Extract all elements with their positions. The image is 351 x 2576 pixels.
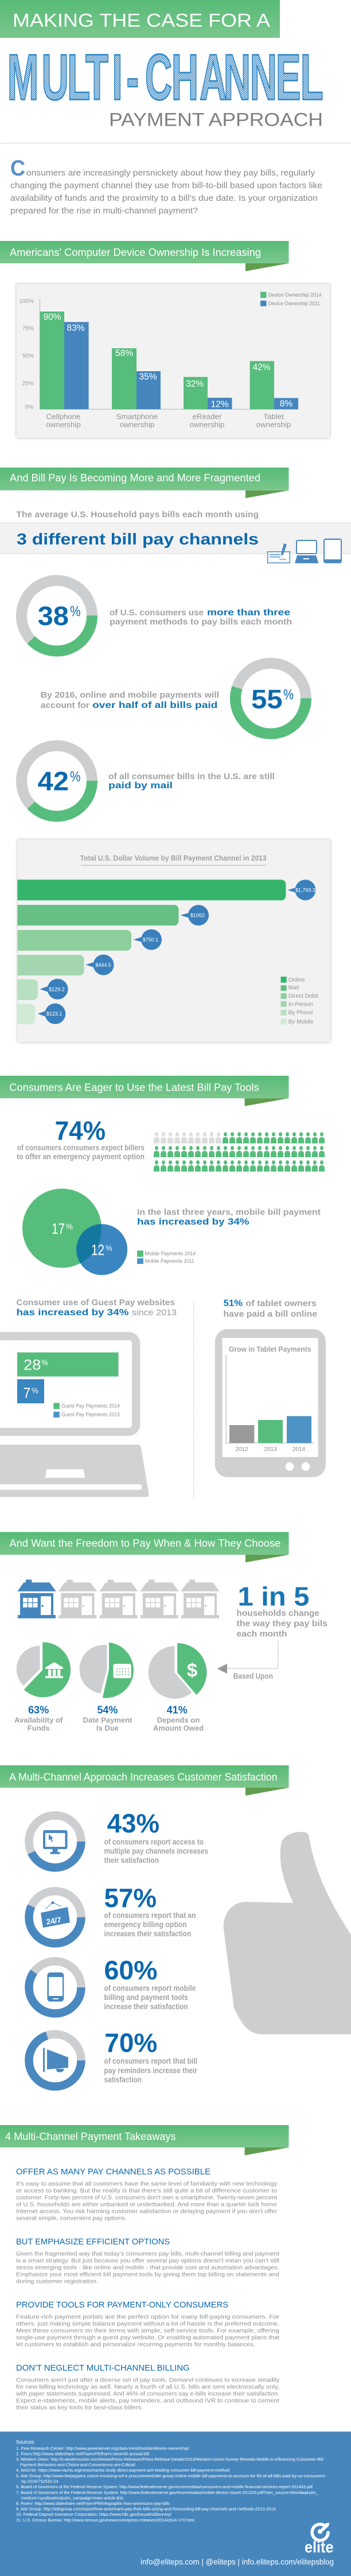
stat donut: 55%: % — [283, 687, 294, 703]
takeaway 1 — [16, 2167, 278, 2221]
stat text: 43%: of consumers report access to — [104, 1838, 204, 1846]
stat: 1 in 5 households: each month — [236, 1630, 287, 1639]
category labels: eReader — [192, 413, 222, 421]
takeaway 2: during customer registration. — [16, 2278, 98, 2285]
takeaway 4: their status as key tools for best-class billers. — [16, 2404, 143, 2411]
section banner: customer satisfaction — [0, 1765, 289, 1796]
stat text: mobile bill payment: has increased by 34% — [137, 1217, 249, 1227]
sources list: Payment-Behaviors-and-Choice-and-Convenience-are-Critical/ — [20, 2462, 136, 2468]
channel legend: By Phone — [288, 1010, 314, 1016]
stat text: guest pay: Consumer use of Guest Pay websites — [16, 1298, 175, 1308]
takeaway 3: single-use payment through a guest pay website. Or enabling automated payment plans that — [16, 2334, 279, 2341]
takeaway 4: Expect e-statements, mobile alerts, pay reminders, and outbound IVR to continue to cement — [16, 2397, 279, 2404]
stat text: 57%: increases their satisfaction — [104, 1929, 191, 1938]
sources list: 8. Fiserv: http://www.slideshare.net/FiservPR/infographic-how-americans-pay-bills — [16, 2501, 170, 2506]
year labels: 2014 — [292, 1446, 306, 1453]
channel legend: Mail — [288, 985, 299, 991]
pie labels: 54% — [97, 1705, 118, 1716]
icon: laptop — [295, 540, 319, 563]
sources list: Sources — [16, 2439, 34, 2445]
panel: device ownership bar chart: 25% — [22, 381, 34, 387]
stat text: 42% — [108, 772, 275, 791]
bar value labels: 58% — [115, 349, 133, 359]
stat text: 60%: 60% — [104, 1955, 157, 1985]
stat donut: 42%: % — [70, 769, 80, 785]
pie labels: 41% — [167, 1705, 188, 1716]
takeaway 2: stress emerging tools - like online and mobile - that provide cost and automation advantages. — [16, 2264, 279, 2271]
guest pay bar 2014 — [17, 1352, 118, 1376]
chart legend: Device Ownership 2011 — [268, 301, 320, 306]
stat text: 70%: satisfaction — [104, 2075, 142, 2084]
venn chart: mobile payments — [22, 1189, 127, 1275]
guest pay bar 2013: 7 — [24, 1386, 30, 1402]
value bubbles: $129.2 — [49, 987, 65, 993]
panel: device ownership bar chart: 50% — [22, 353, 34, 360]
channel legend: Direct Debit — [288, 993, 318, 999]
growth bars — [229, 1416, 311, 1443]
bars 2014 — [40, 312, 274, 409]
bar value labels: 42% — [252, 363, 271, 372]
guest pay bar 2013 — [17, 1379, 44, 1403]
panel: dollar volume by channel — [17, 839, 330, 1042]
elite wordmark: elite — [305, 2538, 334, 2556]
takeaway 3: others, just making simple balance payment without a lot of hassle is the preferred outcome. — [16, 2320, 279, 2327]
takeaway 2: Given the fragmented way that today's consumers pay bills, multi-channel billing and payment — [16, 2250, 279, 2257]
intro paragraph: onsumers are increasingly persnickety about how they pay bills, regularly — [26, 169, 315, 178]
icon: monitor — [43, 1830, 68, 1854]
pie: depends on amount owed 41% — [149, 1643, 206, 1699]
icon: tablet — [323, 539, 342, 563]
sources list: 9. Aite Group: http://aitegroup.com/report/how-americans-pay-their-bills-sizing-and-forecasting-bill-pay-channels-and-methods-2013-2016 — [16, 2507, 276, 2512]
stat text: 55% — [41, 691, 219, 710]
stat: 1 in 5 households — [236, 1581, 327, 1639]
stat text: 60%: increase their satisfaction — [104, 2002, 188, 2011]
pie labels — [14, 1705, 204, 1733]
takeaway 4: with paper statements suppressed. And 46% of consumers say e-bills increase their satisfaction. — [15, 2390, 279, 2397]
channel legend: Online — [288, 977, 305, 983]
sources list: 1. Pew Research Center: http://www.pewinternet.org/data-trend/mobile/device-ownership/ — [16, 2446, 190, 2451]
mobile payments legend — [137, 1251, 196, 1264]
footer contact line: info@eliteps.com | @eliteps | info.eliteps.com/elitepsblog — [141, 2557, 334, 2566]
takeaway 1: of U.S. households are either unbanked or underbanked. And more than a quarter lack home — [16, 2201, 277, 2208]
pie labels: Availability of — [14, 1716, 63, 1725]
stat donut: 42%: 42 — [38, 766, 69, 796]
stat: 1 in 5 households: the way they pay bils — [236, 1620, 327, 1629]
icon: elite logo mark — [312, 2523, 329, 2540]
section banner: freedom to pay: And Want the Freedom to Pay When & How They Choose — [9, 1538, 280, 1549]
takeaway 2: is a smart strategy. But just because you offer several pay options doesn't mean you can't still — [16, 2257, 279, 2264]
panel: device ownership bar chart: 75% — [22, 326, 34, 332]
tablet illustration with growth chart: Grow in Tablet Payments — [229, 1345, 311, 1353]
tablet illustration with growth chart — [215, 1329, 326, 1477]
stat text: 70% — [104, 2028, 198, 2084]
section banner: takeaways: 4 Multi-Channel Payment Takeaways — [5, 2131, 176, 2142]
takeaway 3: let customers to establish and personalize recurring payments for monthly balances. — [16, 2341, 255, 2348]
stat donut: 38%: % — [70, 604, 80, 620]
stat text: 55%: By 2016, online and mobile payments will — [41, 691, 219, 700]
section banner: freedom to pay — [0, 1532, 289, 1562]
pie: availability of funds 63% — [17, 1642, 71, 1697]
value bubbles — [38, 880, 315, 1024]
guest pay bar 2014: % — [41, 1357, 48, 1367]
stat text: 43%: 43% — [107, 1808, 159, 1838]
value bubbles: $1,769.3 — [295, 887, 315, 893]
icon: thumbs up — [224, 1832, 351, 2034]
donut: 43% with monitor icon — [29, 1815, 81, 1867]
bar value labels: 8% — [280, 399, 292, 409]
stat text: 38%: payment methods to pay bills each month — [110, 618, 292, 627]
stat: 74% — [17, 1116, 145, 1161]
pie: date payment is due 54% — [79, 1643, 134, 1698]
section banner: device ownership — [0, 241, 289, 271]
section banner: takeaways — [0, 2125, 289, 2155]
bar value labels — [43, 313, 292, 409]
title banner: making the case: MAKING THE CASE FOR A — [13, 10, 271, 31]
laptop illustration with guest pay chart — [0, 1332, 149, 1497]
takeaway 1: customer. Forty-two percent of U.S. consumers don't own a smartphone. Twenty-seven percent — [16, 2194, 277, 2201]
takeaway 2: Emphasize your most efficient bill payment tools by giving them top billing on statements and — [16, 2271, 279, 2278]
stat donut: 38% — [22, 581, 92, 651]
stat text: guest pay — [16, 1298, 177, 1318]
stat text: 38%: more than three — [207, 608, 290, 618]
category labels: Cellphone — [46, 413, 80, 421]
stat text: 70%: 70% — [104, 2028, 157, 2058]
venn chart: mobile payments: 12 — [91, 1242, 104, 1259]
venn chart: mobile payments: % — [66, 1222, 73, 1231]
guest pay legend: Guest Pay Payments 2013 — [61, 1412, 120, 1418]
stat text: 55%: account for — [41, 701, 89, 710]
sources list: 6. Board of Governors of the Federal Reserve System: http://www.federalreserve.gov/econresdata/consumers-and-mobile-financial-services-report-201403.pdf — [16, 2484, 313, 2489]
value bubbles: $123.1 — [46, 1011, 62, 1017]
value bubbles: $444.5 — [95, 962, 111, 968]
sources list: 2. Fiserv:http://www.slideshare.net/FiservPR/fiserv-seventh-annual-bill — [16, 2452, 149, 2457]
panel: device ownership bar chart — [16, 284, 330, 438]
takeaway 3: PROVIDE TOOLS FOR PAYMENT-ONLY CONSUMERS — [16, 2300, 228, 2310]
category labels: ownership — [120, 421, 154, 429]
stat text: 57% — [104, 1883, 196, 1938]
stat text: 60%: billing and payment tools — [104, 1993, 188, 2002]
guest pay legend — [53, 1403, 120, 1418]
pie labels: Funds — [28, 1724, 50, 1733]
stat: 74%: 74% — [55, 1116, 106, 1146]
category labels: Smartphone — [116, 413, 158, 421]
stat: 1 in 5 households: households change — [236, 1609, 319, 1618]
stat text: guest pay: since 2013 — [132, 1309, 177, 1318]
icon: phone — [47, 1972, 64, 2002]
panel: device ownership bar chart: 100% — [19, 298, 34, 305]
mobile payments legend: Mobile Payments 2014 — [145, 1251, 196, 1256]
chart legend — [260, 292, 322, 306]
stat text: 70%: of consumers report that bill — [104, 2057, 197, 2065]
takeaway 3 — [16, 2300, 280, 2348]
pie labels: Depends on — [157, 1716, 200, 1725]
stat text: 70%: pay reminders increase their — [104, 2066, 198, 2075]
guest pay legend: Guest Pay Payments 2014 — [61, 1403, 120, 1409]
guest pay bar 2014: 28 — [24, 1357, 41, 1373]
takeaway 1: It's easy to assume that all customers have the same level of familiarity with new technology — [16, 2180, 278, 2187]
takeaway 2: BUT EMPHASIZE EFFICIENT OPTIONS — [16, 2237, 170, 2247]
stat text: 38%: of U.S. consumers use — [110, 609, 204, 618]
bar value labels: 12% — [210, 399, 229, 409]
stat text: 57%: 57% — [104, 1883, 157, 1913]
footer panel — [0, 2431, 351, 2576]
people grid: 74 of 100 — [154, 1132, 325, 1172]
value bubbles: $1062 — [190, 912, 205, 918]
sources list: 10. Federal Deposit Insurance Corporation: https://www.fdic.gov/householdsurvey/ — [16, 2512, 172, 2517]
stat: 1 in 5 households: 1 in 5 — [237, 1581, 309, 1611]
section banner: customer satisfaction: A Multi-Channel Approach Increases Customer Satisfaction — [9, 1771, 278, 1783]
takeaway 4: for new billing technology as well. Nearly a fourth of all U.S. bills are sent electronically only, — [16, 2383, 279, 2390]
intro paragraph — [10, 156, 322, 216]
stat text: tablet owners: 51% — [224, 1299, 243, 1309]
section banner: latest tools — [0, 1076, 289, 1106]
stat text: 55%: over half of all bills paid — [92, 701, 217, 710]
pie labels: Date Payment — [83, 1716, 132, 1725]
stat text: 43%: their satisfaction — [104, 1856, 159, 1865]
stat text: 43% — [104, 1808, 208, 1865]
stat text: 57%: of consumers report that an — [104, 1911, 196, 1920]
stat text: 42%: of all consumer bills in the U.S. are still — [108, 772, 275, 781]
sources list: by-2016/752532-24 — [22, 2479, 58, 2484]
venn chart: mobile payments: 17 — [52, 1220, 65, 1238]
takeaway 1: Internet access. You risk harming customer satisfaction or delaying payment if you don't offer — [16, 2208, 278, 2215]
takeaway 3: Meet these consumers on their terms with simple, self-service tools. For example, offering — [16, 2327, 279, 2334]
channel legend: By Mobile — [288, 1019, 314, 1025]
bar value labels: 32% — [186, 379, 204, 389]
icon row: five houses — [17, 1579, 220, 1618]
stat donut: 42% — [22, 746, 92, 816]
year labels: 2013 — [264, 1446, 277, 1453]
donut: 70% with megaphone icon — [29, 2034, 81, 2087]
sources list: 3. Western Union: http://ir.westernunion.com/News/Press-Releases/Press-Release-Details/2013/Western-Union-Survey-Reveals-Mobile-is-Influencing-Consumer-Bill- — [16, 2457, 325, 2462]
takeaway 4 — [15, 2363, 280, 2411]
pie labels: Amount Owed — [153, 1724, 204, 1733]
intro paragraph: changing the payment channel they use from bill-to-bill based upon factors like — [10, 181, 322, 190]
mobile payments legend: Mobile Payments 2011 — [145, 1258, 194, 1264]
stat text: 60%: of consumers report mobile — [104, 1984, 196, 1993]
section banner: device ownership: Americans' Computer Device Ownership Is Increasing — [10, 247, 261, 258]
chart legend: Device Ownership 2014 — [268, 292, 322, 298]
takeaway 1: OFFER AS MANY PAY CHANNELS AS POSSIBLE — [16, 2167, 210, 2177]
stat text: tablet owners — [224, 1299, 317, 1319]
stat donut: 38%: 38 — [38, 601, 69, 631]
title: multi-channel: MULTI-CHANNEL — [7, 41, 323, 114]
icon: megaphone — [43, 2048, 68, 2072]
pie labels: 63% — [28, 1705, 49, 1716]
intro paragraph: prepared for the rise in multi-channel payment? — [10, 207, 198, 216]
stat: 74%: to offer an emergency payment option — [17, 1153, 145, 1161]
arrow: based upon: Based Upon — [233, 1672, 273, 1680]
band: 3 different bill pay channels — [0, 523, 351, 554]
stat text: 42%: paid by mail — [108, 781, 173, 791]
category labels: ownership — [190, 421, 224, 429]
section banner: fragmented — [0, 468, 289, 498]
sources list: 4. NACHA: https://www.nacha.org/news/nacha-study-direct-payment-ach-leading-consumer-bill-payment-method — [16, 2468, 229, 2473]
pie labels: Is Due — [96, 1724, 119, 1733]
icon: bank — [45, 1662, 63, 1678]
channel legend — [281, 976, 318, 1025]
icon: check and pen — [268, 543, 290, 563]
arrow: based upon — [217, 1641, 278, 1680]
sources list — [16, 2439, 327, 2523]
stat text: 57%: emergency billing option — [104, 1920, 187, 1929]
panel: dollar volume by channel: Total U.S. Dollar Volume by Bill Payment Channel in 2013 — [80, 854, 266, 862]
sources list: 7. Board of Governors of the Federal Reserve System: http://www.federalreserve.gov/econresdata/mobile-device-report-201203.pdf?utm_source=Mondaq&utm_ — [16, 2490, 319, 2495]
takeaway 1: several simple, convenient pay options. — [16, 2215, 127, 2221]
panel: device ownership bar chart: 0% — [25, 404, 33, 411]
bars 2011 — [64, 322, 298, 409]
icon: 24/7 sign: 24/7 — [46, 1916, 62, 1927]
category labels: ownership — [46, 421, 81, 429]
channel legend: In-Person — [288, 1001, 313, 1007]
guest pay bar 2013: % — [32, 1386, 38, 1395]
title banner: making the case — [0, 0, 280, 38]
takeaway 4: DON'T NEGLECT MULTI-CHANNEL BILLING — [16, 2363, 190, 2373]
intro paragraph: C — [10, 156, 25, 181]
stat text: guest pay: has increased by 34% — [16, 1308, 128, 1318]
sources list: 5. Aite Group: http://www.thepaypers.com/e-invoicing-scf-e-procurement/aite-group-online-mobile-bill-payments-to-account-for-55-of-all-bills-paid-by-us-consumers- — [16, 2473, 327, 2478]
takeaway 3: Feature-rich payment portals are the perfect option for many bill-paying consumers. For — [16, 2313, 280, 2320]
year labels — [235, 1446, 306, 1453]
stat text: 43%: multiple pay channels increases — [104, 1847, 208, 1855]
stat text: mobile bill payment — [137, 1208, 321, 1227]
section banner: latest tools: Consumers Are Eager to Use the Latest Bill Pay Tools — [9, 1082, 259, 1094]
takeaway 4: Consumers aren't just after a diverse set of pay tools. Demand continues to increase steadily — [16, 2376, 280, 2383]
intro paragraph: availability of funds and the proximity to a bill's due date. Is your organization — [10, 194, 318, 203]
subtitle: payment approach: PAYMENT APPROACH — [109, 109, 323, 130]
horizontal bars — [17, 880, 286, 1024]
average household lead-in: The average U.S. Household pays bills each month using — [16, 511, 259, 520]
year labels: 2012 — [235, 1446, 248, 1453]
stat donut: 55% — [235, 663, 306, 734]
stat text: 38% — [110, 608, 292, 627]
takeaway 2 — [16, 2237, 279, 2285]
stat: 74%: of consumers consumers expect billers — [17, 1143, 145, 1152]
stat donut: 55%: 55 — [251, 684, 282, 714]
sources list: 11. U.S. Census Bureau: http://www.census.gov/newsroom/press-releases/2014/cb14-170.html — [16, 2517, 194, 2523]
category labels — [46, 413, 291, 429]
bar value labels: 35% — [139, 372, 157, 382]
donut: 60% with phone icon — [29, 1961, 81, 2014]
pie: depends on amount owed 41%: $ — [187, 1660, 197, 1681]
bar value labels: 83% — [67, 324, 85, 333]
stat text: 60% — [104, 1955, 196, 2011]
icon: calendar — [114, 1664, 131, 1678]
sources list: medium=syndication&utm_campaign=inter-article-link — [21, 2495, 123, 2500]
donut: 57% with 24/7 sign icon — [29, 1891, 81, 1943]
band: 3 different bill pay channels: 3 different bill pay channels — [17, 530, 259, 548]
category labels: Tablet — [263, 413, 284, 421]
takeaway 1: or access to banking. But the reality is that there's still quite a bit of difference customer to — [16, 2187, 277, 2194]
stat text: tablet owners: of tablet owners — [245, 1299, 317, 1309]
value bubbles: $750.1 — [143, 937, 158, 943]
bar value labels: 90% — [43, 313, 61, 322]
stat text: mobile bill payment: In the last three years, mobile bill payment — [137, 1208, 321, 1217]
section banner: fragmented: And Bill Pay Is Becoming More and More Fragmented — [10, 472, 260, 484]
category labels: ownership — [256, 421, 291, 429]
venn chart: mobile payments: % — [106, 1243, 112, 1252]
stat text: tablet owners: have paid a bill online — [224, 1310, 317, 1319]
